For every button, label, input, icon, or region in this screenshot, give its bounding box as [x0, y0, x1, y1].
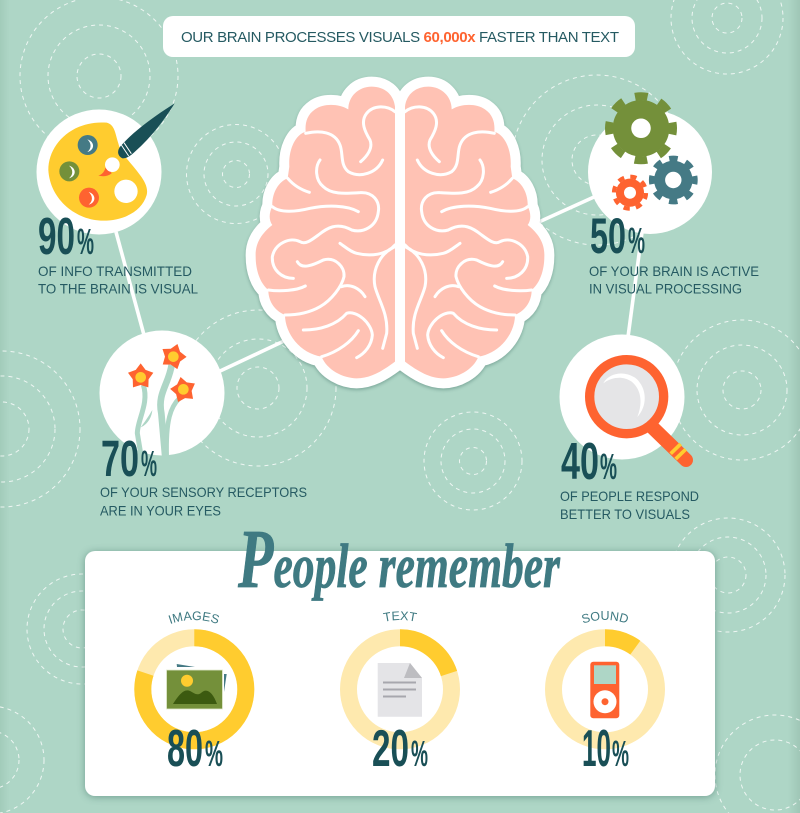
- text: 70% description: ARE IN YOUR EYES: [100, 502, 221, 518]
- icon: paint palette in circle: [36, 103, 175, 234]
- value: 10%: 10: [582, 720, 611, 778]
- icon: flowers in circle: [100, 330, 224, 458]
- text: 90% description: [38, 263, 198, 296]
- text: 70% description: [100, 484, 307, 518]
- text: 90% description: TO THE BRAIN IS VISUAL: [38, 280, 198, 296]
- stat: 50%: 50: [590, 208, 626, 264]
- brain right hemisphere: [405, 87, 544, 378]
- text: 40% description: [560, 488, 699, 522]
- icon: orange gear: [611, 174, 649, 212]
- icon: gears in circle: [588, 96, 712, 234]
- text: %: [141, 443, 157, 484]
- text: 50% description: OF YOUR BRAIN IS ACTIVE: [589, 263, 759, 279]
- chart: sound 10%: [545, 611, 665, 778]
- stat: 70%: 70: [101, 430, 139, 487]
- header banner: OUR BRAIN PROCESSES VISUALS 60,000x FASTER THAN TEXT: [181, 29, 619, 46]
- brain left hemisphere: [256, 87, 395, 378]
- icon: document: [378, 663, 422, 717]
- text: 50% description: IN VISUAL PROCESSING: [589, 280, 742, 296]
- icon: teal gear: [652, 158, 695, 202]
- label: images: IMAGES: [168, 611, 219, 624]
- label: text: TEXT: [382, 611, 418, 622]
- stat: 40%: %: [600, 446, 617, 487]
- value: 20%: %: [411, 733, 428, 774]
- connector lines: [116, 197, 642, 372]
- icon: magnifying glass in circle: [560, 334, 686, 460]
- icon: picture: [166, 664, 227, 709]
- chart: images 80%: [134, 611, 254, 778]
- stat: 50%: %: [628, 220, 645, 261]
- donut: text: [348, 638, 452, 741]
- text: 40% description: BETTER TO VISUALS: [560, 506, 690, 522]
- text: 90% description: OF INFO TRANSMITTED: [38, 263, 192, 279]
- chart: text 20%: [340, 611, 460, 778]
- label: sound: SOUND: [582, 611, 628, 623]
- value: 80%: %: [205, 733, 223, 774]
- brain illustration: [256, 87, 544, 378]
- text: 40% description: OF PEOPLE RESPOND: [560, 488, 699, 504]
- value: 10%: %: [612, 733, 629, 774]
- text: 50% description: [589, 263, 759, 296]
- heading: People remember: People remember: [237, 513, 561, 606]
- stat: 90%: 90: [38, 208, 75, 266]
- icon: large green gear: [609, 96, 673, 160]
- value: 20%: 20: [372, 720, 409, 778]
- donut: images: [143, 638, 246, 741]
- donut: sound: [554, 638, 656, 741]
- stat: 90%: %: [77, 221, 94, 262]
- text: 70% description: OF YOUR SENSORY RECEPTORS: [100, 484, 307, 500]
- stat: 40%: 40: [561, 433, 599, 491]
- header banner: [163, 16, 635, 57]
- icon: music player: [590, 662, 619, 718]
- panel: people remember: [80, 513, 720, 802]
- value: 80%: 80: [167, 720, 203, 778]
